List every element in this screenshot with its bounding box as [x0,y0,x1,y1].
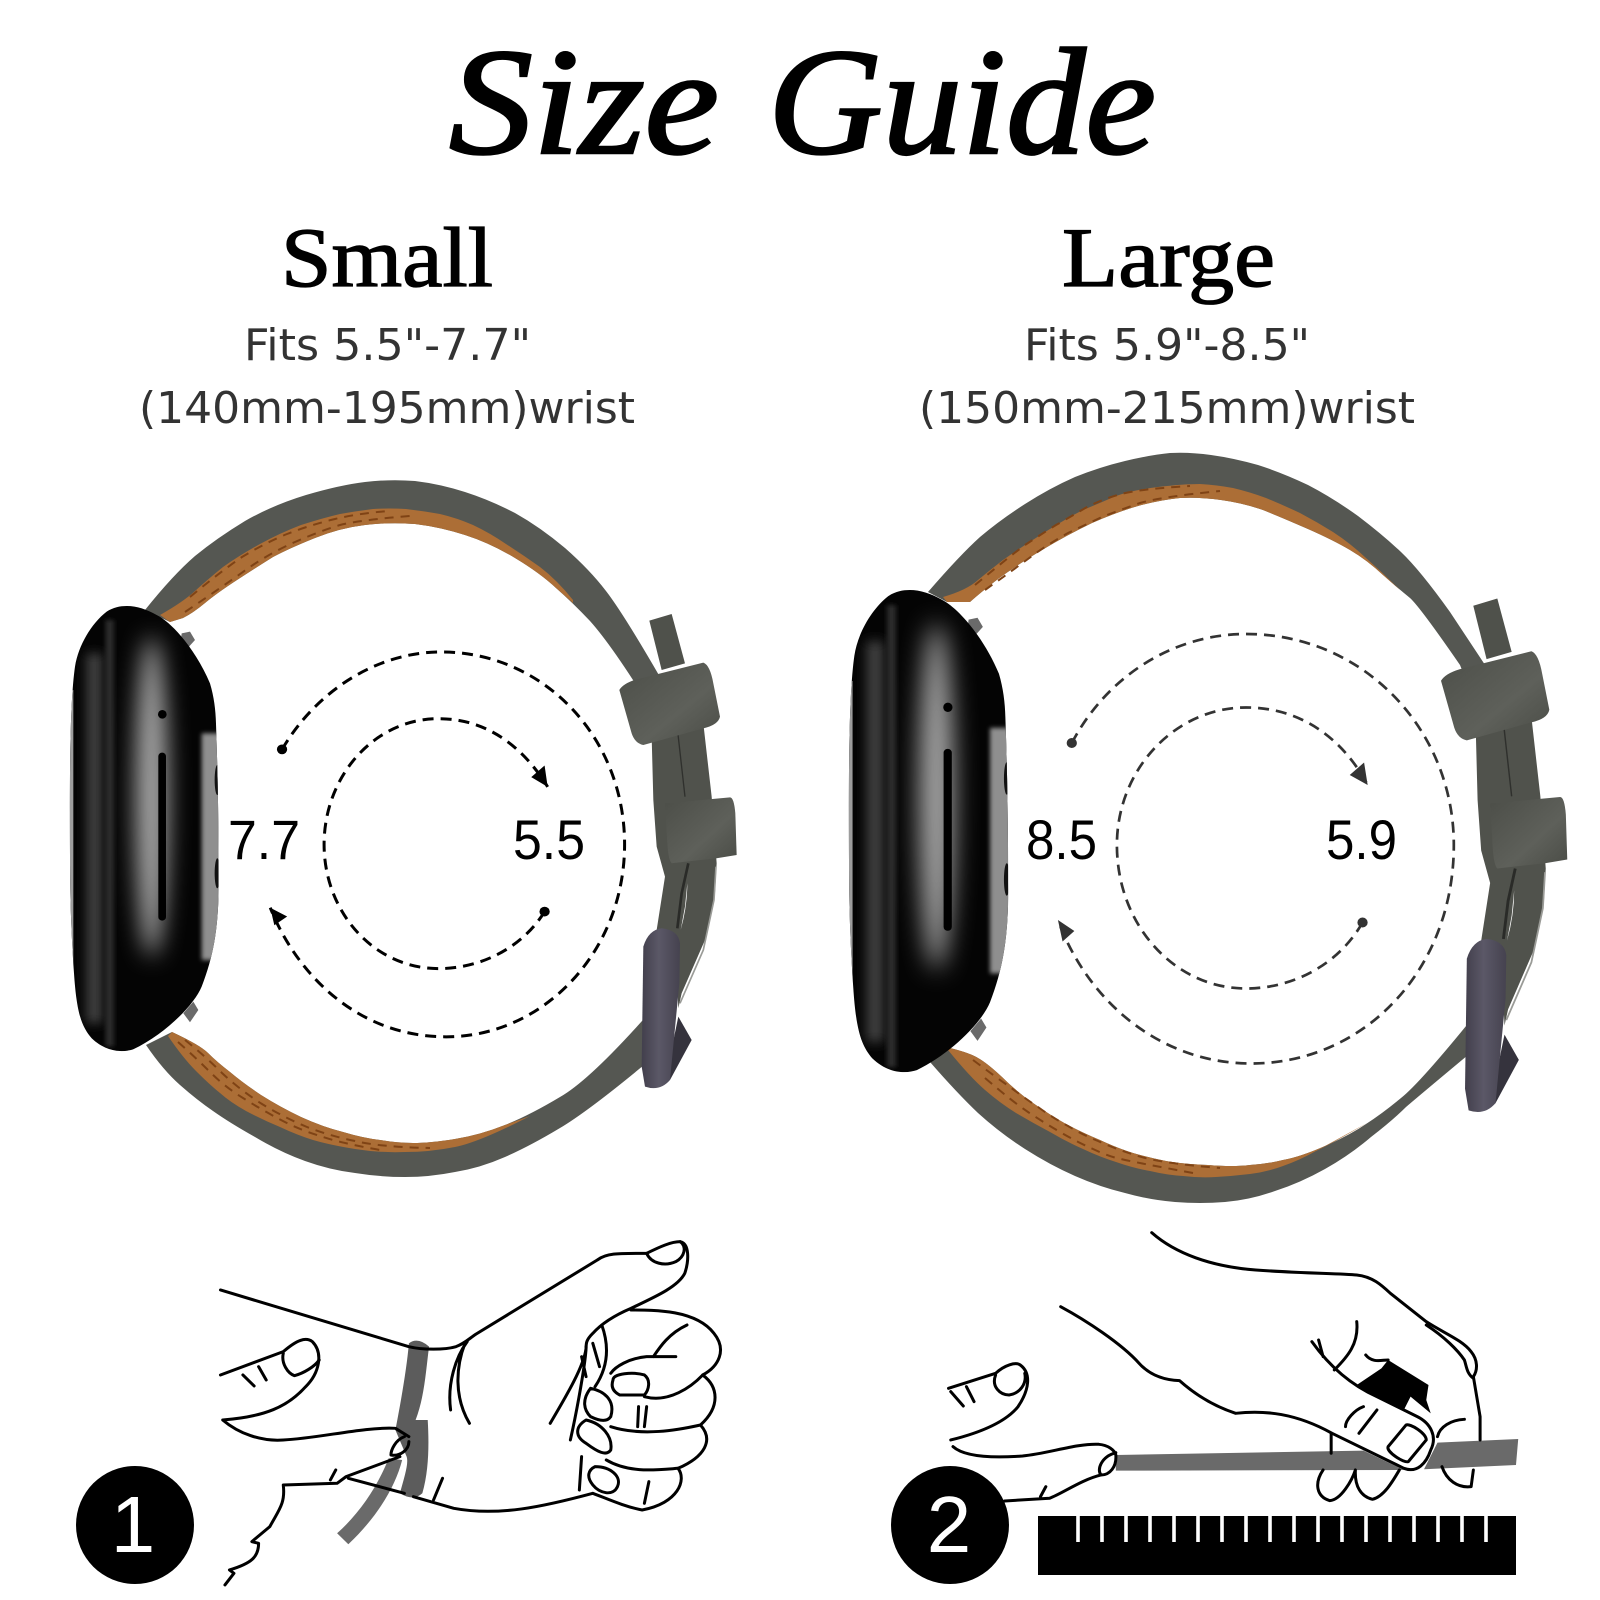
arrows: large range [1058,634,1454,1064]
keeper loop top [619,663,720,745]
lower band [930,1015,1480,1203]
left hand thumb [953,1444,1116,1501]
fingers under strip [1318,1419,1473,1501]
icon: hand measuring strip on ruler [949,1233,1518,1501]
panel: step 2 illustration [891,1233,1518,1584]
label: 7.7: 7.7 [228,808,300,871]
keeper loop top [1441,651,1549,740]
buckle hinge [1495,1035,1519,1103]
thumbnail [1346,1407,1426,1462]
badge: step 2 [891,1466,1009,1584]
lower hand outline [1061,1307,1433,1470]
watch body [842,584,1013,1078]
text: small fit range [139,320,635,434]
strap and buckle [619,614,737,1088]
measuring hand [220,1339,409,1440]
wrist and thumb outline [220,1242,688,1423]
watch sensor dot [158,710,167,719]
heading: Large: Large [1062,211,1275,305]
watch body [63,600,223,1057]
watch sensor slit [944,749,952,931]
left hand finger [949,1364,1028,1440]
text: large fit range: Fits 5.9"-8.5" [1024,320,1310,371]
strap tail [649,614,685,670]
ruler [1038,1516,1516,1575]
heading: Small: Small [281,211,493,305]
text: large fit range: (150mm-215mm)wrist [919,383,1415,434]
badge: step 2: 2 [927,1480,971,1569]
panel: step 1 illustration [76,1242,720,1585]
panel: small watch band [63,480,737,1177]
fist outline [413,1310,720,1511]
upper band [145,480,668,690]
keeper loop bottom [1490,797,1567,869]
label: 5.5: 5.5 [513,808,585,871]
badge: step 1: 1 [111,1480,155,1569]
panel: large watch band [842,453,1567,1203]
measuring strip tail [337,1458,402,1544]
wrist creases [434,1342,469,1500]
buckle hinge [669,1017,692,1080]
label: 5.9: 5.9 [1326,808,1397,871]
strap [1476,717,1546,1026]
strap [652,723,717,1008]
upper hand outline [1152,1233,1480,1440]
title: Guide [768,18,1156,186]
title: Size [449,18,719,186]
watch sensor dot [943,703,953,712]
keeper loop bottom [665,797,737,863]
label: 8.5: 8.5 [1026,808,1097,871]
watch sensor slit [158,753,166,921]
strap and buckle [1441,599,1567,1112]
badge: step 1 [76,1466,194,1584]
text: small fit range: Fits 5.5"-7.7" [244,320,531,371]
text: large fit range [919,320,1415,434]
measuring strip [395,1341,429,1497]
measuring strip [1116,1439,1518,1471]
black shadow [1357,1360,1431,1413]
lower band [146,1012,650,1177]
strap tail [1473,599,1512,659]
icon: wrist with measuring strip [220,1242,720,1585]
buckle [642,928,680,1088]
arrows: small range [270,652,625,1037]
text: small fit range: (140mm-195mm)wrist [139,383,635,434]
upper band [928,453,1495,690]
buckle [1465,939,1506,1112]
